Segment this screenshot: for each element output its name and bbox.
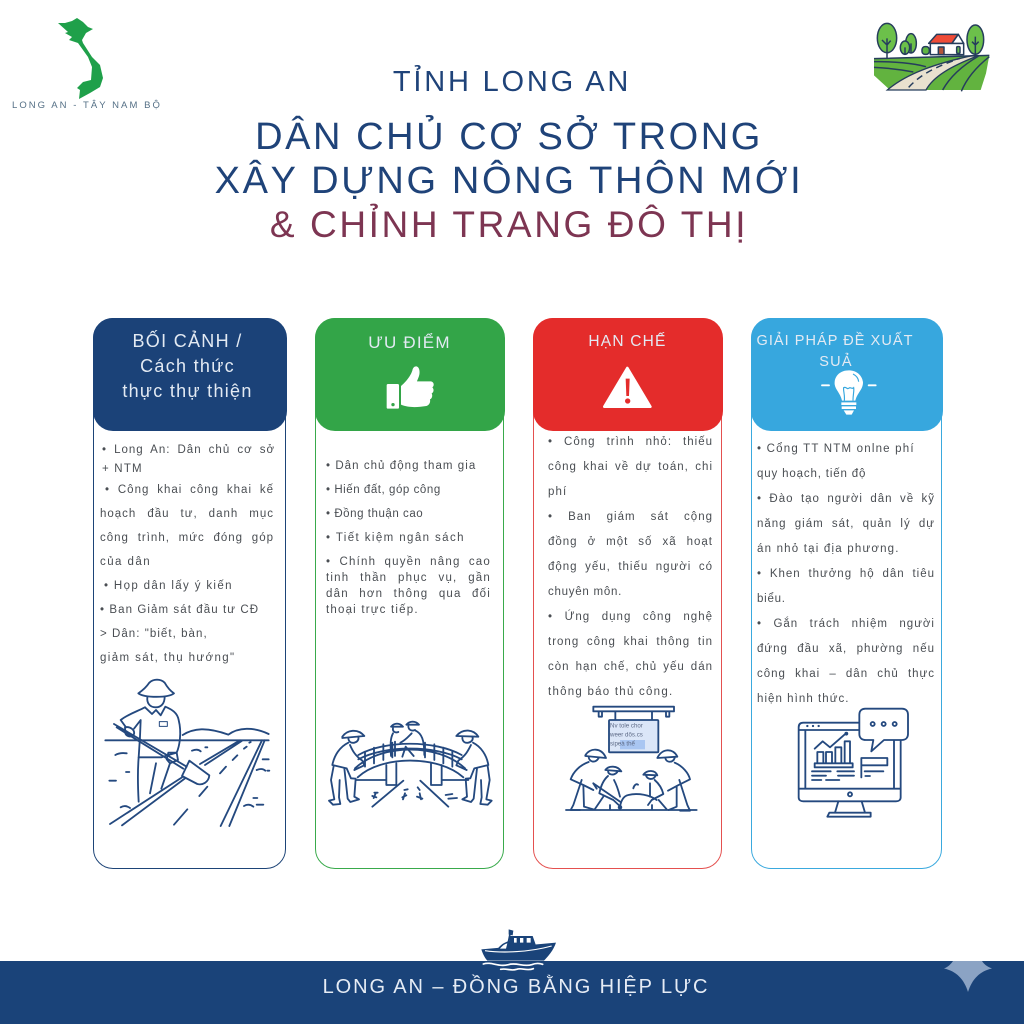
text: bối cảnh: • Công khai công khai kế: [105, 484, 274, 496]
illustration: people building a bridge: [328, 720, 493, 808]
text: bối cảnh: của dân: [100, 556, 151, 568]
panel header: giải pháp: GIẢI PHÁP ĐỀ XUẤT: [756, 332, 913, 348]
panel header: ưu điểm: [314, 318, 504, 430]
title line 1: DÂN CHỦ CƠ SỞ TRONG: [255, 116, 763, 158]
illustration: workers under a notice board: Nv tole chor: [610, 723, 643, 730]
text: giải pháp: công khai – dân chủ thực: [757, 668, 935, 680]
title block: [215, 65, 803, 245]
panel: hạn chế: [533, 318, 722, 869]
icon: boat: [481, 929, 556, 971]
text: ưu điểm: [326, 460, 491, 616]
text: giải pháp: hiện hình thức.: [757, 693, 850, 705]
text: giải pháp: năng giám sát, quản lý dự: [757, 518, 935, 530]
text: hạn chế: • Công trình nhỏ: thiếu: [548, 436, 713, 448]
text: ưu điểm: • Chính quyền nâng cao: [326, 556, 491, 568]
text: bối cảnh: + NTM: [102, 463, 143, 475]
panel header: hạn chế: [532, 318, 722, 430]
text: giải pháp: • Cổng TT NTM onlne phí: [757, 443, 915, 455]
panel: bối cảnh: [93, 318, 286, 869]
text: hạn chế: chuyên môn.: [548, 586, 622, 598]
icon: Vietnam map logo: [58, 18, 103, 99]
text: hạn chế: thông báo thủ công.: [548, 686, 673, 698]
text: ưu điểm: • Đồng thuận cao: [326, 508, 423, 520]
icon: thumbs up: [386, 366, 434, 409]
illustration: monitor with chart and speech bubble: [798, 708, 909, 818]
text: ưu điểm: • Dân chủ động tham gia: [326, 460, 476, 472]
text: bối cảnh: • Long An: Dân chủ cơ sở: [102, 444, 275, 456]
text: giải pháp: • Khen thưởng hộ dân tiêu: [757, 568, 935, 580]
text: ưu điểm: tinh thần phục vụ, gần: [326, 572, 491, 584]
title line 2: XÂY DỰNG NÔNG THÔN MỚI: [215, 160, 803, 202]
illustration: workers under a notice board: [565, 706, 698, 812]
text: bối cảnh: > Dân: "biết, bàn,: [100, 628, 208, 640]
text: giải pháp: đứng đầu xã, phường nếu: [757, 643, 935, 655]
text: ưu điểm: dân hơn thông qua đối: [326, 588, 491, 600]
panel header: bối cảnh: BỐI CẢNH /: [132, 330, 242, 350]
panel header: bối cảnh: [92, 318, 286, 430]
text: hạn chế: phí: [548, 486, 567, 498]
text: bối cảnh: công trình, mức đóng góp: [100, 532, 274, 544]
text: bối cảnh: • Ban Giảm sát đầu tư CĐ: [100, 604, 259, 616]
text: giải pháp: • Đào tạo người dân về kỹ: [757, 493, 935, 505]
icon: four-point star: [944, 961, 992, 992]
text: giải pháp: biểu.: [757, 593, 786, 605]
text: hạn chế: • Ứng dụng công nghệ: [548, 611, 713, 623]
text: hạn chế: trong công khai thông tin: [548, 636, 713, 648]
panel header: giải pháp: [750, 318, 942, 430]
panel header: hạn chế: HẠN CHẾ: [588, 332, 667, 350]
icon: farm and house: [874, 22, 990, 92]
text: bối cảnh: giảm sát, thụ hướng": [100, 652, 236, 664]
text: giải pháp: • Gắn trách nhiệm người: [757, 618, 935, 630]
icon: warning triangle: [603, 366, 652, 408]
subtitle: province: TỈNH LONG AN: [393, 66, 631, 98]
panel header: bối cảnh: Cách thức: [140, 356, 235, 376]
text: ưu điểm: • Hiến đất, góp công: [326, 484, 441, 496]
text: hạn chế: [548, 436, 713, 698]
text: ưu điểm: • Tiết kiệm ngân sách: [326, 532, 465, 544]
panel header: bối cảnh: thực thự thiện: [122, 380, 253, 400]
icon: light bulb: [821, 370, 877, 415]
footer band: [0, 961, 1024, 1024]
panel: ưu điểm: [315, 318, 504, 869]
footer slogan: LONG AN – ĐỒNG BẰNG HIỆP LỰC: [323, 976, 709, 998]
text: hạn chế: đồng ở một số xã hoạt: [548, 536, 713, 548]
text: bối cảnh: • Họp dân lấy ý kiến: [104, 580, 233, 592]
text: giải pháp: quy hoạch, tiến độ: [757, 468, 866, 480]
illustration: workers under a notice board: weer dõs.cs: [609, 731, 643, 738]
text: bối cảnh: [100, 444, 275, 664]
text: hạn chế: còn hạn chế, chủ yếu dán: [548, 661, 713, 673]
panel: giải pháp: [751, 318, 942, 869]
illustration: workers under a notice board: sipeà thể: [610, 741, 636, 748]
text: hạn chế: động yếu, thiếu người có: [548, 561, 713, 573]
text: hạn chế: công khai về dự toán, chi: [548, 461, 713, 473]
panel header: ưu điểm: ƯU ĐIỂM: [368, 332, 451, 352]
title line 3: & CHỈNH TRANG ĐÔ THỊ: [270, 204, 748, 245]
text: bối cảnh: hoạch đầu tư, danh mục: [100, 508, 274, 520]
text: giải pháp: án nhỏ tại địa phương.: [757, 543, 900, 555]
text: ưu điểm: thoại trực tiếp.: [326, 604, 419, 616]
text: hạn chế: • Ban giám sát cộng: [548, 511, 713, 523]
logo caption: LONG AN - TÂY NAM BỘ: [12, 100, 162, 111]
illustration: farmer with shovel on road: [104, 678, 270, 827]
text: giải pháp: [757, 442, 935, 705]
panel header: giải pháp: SUẢ: [819, 354, 853, 370]
